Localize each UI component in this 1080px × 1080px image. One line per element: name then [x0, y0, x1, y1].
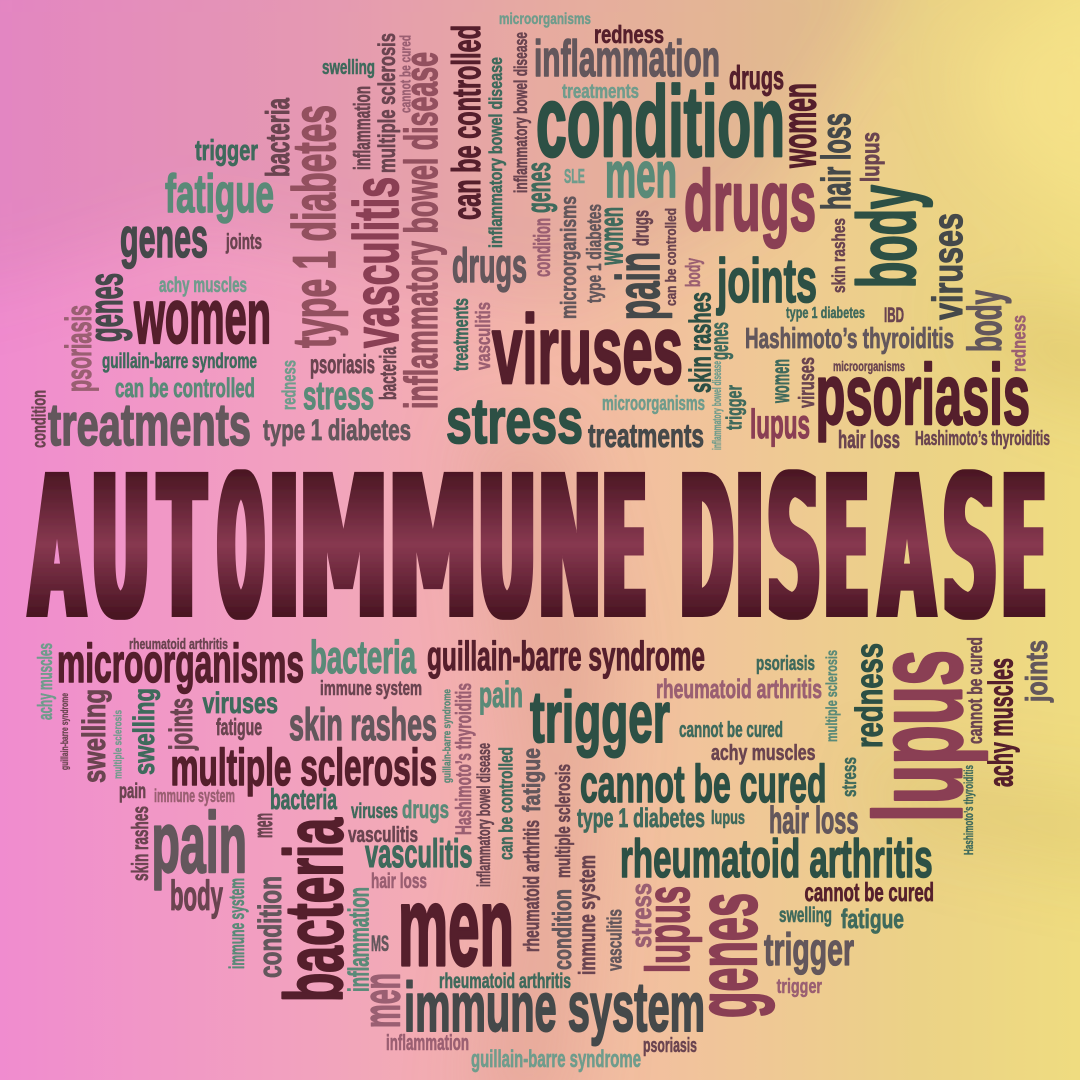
word: psoriasis: psoriasis [58, 305, 99, 392]
word: psoriasis: psoriasis [310, 349, 375, 379]
word: microorganisms: microorganisms [57, 632, 304, 694]
word: drugs: drugs [628, 210, 654, 246]
word: fatigue: fatigue [518, 748, 546, 812]
word: viruses: viruses [492, 295, 683, 404]
word: viruses: viruses [794, 357, 819, 408]
word: viruses: viruses [202, 687, 278, 720]
word: inflammation: inflammation [534, 30, 720, 87]
word: condition: condition [547, 889, 577, 970]
title: S [767, 432, 821, 664]
word: joints: joints [1019, 640, 1054, 703]
word: lupus: lupus [750, 401, 810, 447]
word: guillain-barre syndrome: guillain-barre syndrome [102, 350, 257, 373]
word: achy muscles: achy muscles [711, 740, 816, 765]
word: body: body [842, 185, 933, 288]
word: guillain-barre syndrome: guillain-barre syndrome [427, 633, 705, 679]
word: bacteria: bacteria [375, 347, 401, 400]
word: type 1 diabetes: type 1 diabetes [786, 305, 865, 322]
word: trigger: trigger [195, 135, 258, 167]
word: cannot be cured: cannot be cured [580, 755, 826, 814]
panel: upper word cloud [30, 11, 1050, 458]
word: treatments: treatments [588, 417, 704, 454]
panel: upper word cloud: genes [80, 273, 133, 342]
word: trigger: trigger [722, 385, 746, 430]
word: men: men [605, 138, 677, 211]
title: T [159, 432, 205, 664]
word: achy muscles: achy muscles [982, 658, 1020, 787]
word: stress: stress [303, 374, 374, 418]
word: swelling: swelling [322, 57, 375, 79]
word: women: women [133, 274, 271, 360]
word: genes: genes [520, 162, 558, 213]
word: Hashimoto’s thyroiditis: Hashimoto’s thyroiditis [745, 323, 954, 355]
word: can be controlled: can be controlled [496, 747, 518, 860]
title: N [538, 432, 601, 664]
word: vasculitis: vasculitis [473, 302, 495, 370]
word: multiple sclerosis: multiple sclerosis [553, 764, 575, 878]
word: inflammatory bowel disease: inflammatory bowel disease [486, 57, 506, 248]
word: pain: pain [479, 674, 523, 715]
word: IBD: IBD [884, 304, 904, 327]
title: A [880, 432, 934, 664]
word: type 1 diabetes: type 1 diabetes [584, 204, 606, 303]
word: swelling: swelling [779, 904, 832, 927]
word: cannot be cured: cannot be cured [679, 717, 783, 742]
word: bacteria: bacteria [259, 98, 296, 177]
word: genes: genes [120, 206, 208, 269]
word: inflammation: inflammation [386, 1030, 469, 1055]
word: inflammatory bowel disease: inflammatory bowel disease [474, 743, 494, 887]
word: vasculitis: vasculitis [342, 177, 412, 348]
word: cannot be cured: cannot be cured [965, 637, 987, 744]
word: multiple sclerosis: multiple sclerosis [170, 739, 437, 797]
word: lupus: lupus [855, 132, 885, 182]
title: I [735, 432, 764, 664]
word: immune system: immune system [320, 678, 422, 700]
title: E [824, 432, 868, 664]
word: redness: redness [594, 21, 664, 49]
word: body: body [683, 257, 705, 287]
word: rheumatoid arthritis: rheumatoid arthritis [656, 674, 822, 704]
word: drugs: drugs [452, 240, 527, 293]
word: MS: MS [371, 931, 389, 956]
panel: lower word cloud: men [248, 813, 278, 838]
word: multiple sclerosis: multiple sclerosis [824, 650, 841, 742]
word: Hashimoto’s thyroiditis: Hashimoto’s thyroiditis [451, 683, 476, 835]
word: lupus: lupus [634, 886, 702, 973]
word: condition: condition [252, 876, 288, 978]
word: can be controlled: can be controlled [115, 373, 255, 403]
word: trigger: trigger [764, 924, 854, 975]
word: microorganisms: microorganisms [602, 393, 705, 415]
word: SLE: SLE [564, 166, 585, 188]
word: treatments: treatments [48, 392, 251, 458]
word: genes: genes [706, 322, 734, 360]
word: vasculitis: vasculitis [365, 832, 472, 876]
word: pain: pain [605, 252, 672, 320]
word: swelling: swelling [76, 689, 112, 783]
title: U [478, 432, 536, 664]
word: immune system: immune system [574, 855, 600, 975]
word: body: body [170, 872, 223, 919]
word: women: women [767, 359, 795, 404]
word: women: women [593, 207, 630, 266]
word: immune system: immune system [226, 878, 249, 969]
word: trigger: trigger [530, 678, 670, 758]
word: stress: stress [839, 757, 861, 797]
word: achy muscles: achy muscles [159, 274, 247, 297]
title: D [680, 432, 733, 664]
word: achy muscles: achy muscles [35, 643, 57, 720]
title: O [218, 432, 264, 664]
word: bacteria: bacteria [310, 631, 416, 683]
word: hair loss: hair loss [838, 426, 900, 454]
word: inflammation: inflammation [349, 86, 375, 170]
word: fatigue: fatigue [165, 164, 274, 224]
word: stress: stress [626, 883, 658, 948]
word: microorganisms: microorganisms [833, 358, 905, 374]
word: genes: genes [680, 893, 775, 1018]
word: cannot be cured: cannot be cured [398, 35, 414, 113]
word: men: men [352, 973, 412, 1028]
word: trigger: trigger [777, 976, 822, 998]
word: joints: joints [225, 229, 262, 254]
word: joints: joints [163, 698, 199, 751]
word: treatments: treatments [562, 81, 639, 103]
word: condition: condition [529, 218, 555, 277]
word: men: men [398, 864, 514, 989]
word: immune system: immune system [154, 786, 235, 806]
word: pain: pain [152, 796, 247, 891]
word: inflammatory bowel disease: inflammatory bowel disease [710, 361, 724, 450]
title: M [388, 432, 478, 664]
word: can be controlled: can be controlled [663, 208, 680, 306]
word: psoriasis: psoriasis [643, 1035, 697, 1057]
word: skin rashes: skin rashes [127, 806, 153, 881]
word: type 1 diabetes: type 1 diabetes [263, 414, 411, 447]
word: inflammation: inflammation [344, 887, 376, 992]
word: microorganisms: microorganisms [556, 196, 581, 319]
word: bacteria: bacteria [270, 784, 338, 816]
word: condition: condition [30, 390, 50, 448]
word: women: women [774, 83, 826, 169]
word: hair loss: hair loss [769, 800, 858, 842]
word: guillain-barre syndrome: guillain-barre syndrome [442, 689, 454, 783]
word: skin rashes: skin rashes [289, 699, 437, 750]
word: redness: redness [849, 643, 891, 748]
word: stress: stress [446, 385, 583, 457]
word: condition: condition [536, 66, 785, 178]
word: immune system: immune system [404, 968, 705, 1046]
panel: lower word cloud [35, 631, 1054, 1073]
word: viruses: viruses [351, 800, 398, 823]
word: bacteria: bacteria [269, 817, 360, 1002]
word: lupus: lupus [711, 808, 745, 829]
word: drugs: drugs [684, 154, 816, 249]
word: multiple sclerosis: multiple sclerosis [113, 710, 125, 779]
word: hair loss: hair loss [371, 870, 427, 893]
word: redness: redness [280, 360, 300, 410]
word: hair loss: hair loss [813, 113, 859, 210]
title: M [299, 432, 388, 664]
word: psoriasis: psoriasis [756, 653, 815, 675]
word: joints: joints [716, 247, 817, 316]
title: E [602, 432, 646, 664]
word: body: body [958, 290, 1011, 352]
word: vasculitis: vasculitis [348, 822, 418, 847]
word: Hashimoto’s thyroiditis: Hashimoto’s thyroiditis [961, 765, 976, 855]
word: guillain-barre syndrome: guillain-barre syndrome [60, 693, 71, 770]
word: vasculitis: vasculitis [605, 909, 627, 971]
title: A [30, 432, 84, 664]
word: redness: redness [1010, 315, 1031, 372]
word: skin rashes: skin rashes [829, 218, 849, 293]
word: rheumatoid arthritis: rheumatoid arthritis [439, 970, 571, 993]
word: drugs: drugs [729, 59, 784, 96]
word: swelling: swelling [128, 688, 161, 775]
word: guillain-barre syndrome: guillain-barre syndrome [471, 1046, 641, 1073]
word: pain: pain [119, 780, 146, 803]
title: U [91, 432, 150, 664]
word: skin rashes: skin rashes [682, 292, 718, 393]
word: fatigue: fatigue [841, 904, 904, 934]
word: viruses: viruses [924, 213, 971, 320]
word: cannot be cured: cannot be cured [804, 877, 934, 907]
word: treatments: treatments [450, 298, 473, 371]
word: fatigue: fatigue [216, 714, 262, 740]
word: lupus: lupus [851, 650, 988, 822]
title: I [268, 432, 300, 664]
word: type 1 diabetes: type 1 diabetes [577, 803, 705, 833]
word: rheumatoid arthritis: rheumatoid arthritis [519, 820, 544, 952]
word: drugs: drugs [402, 796, 449, 824]
word: rheumatoid arthritis: rheumatoid arthritis [129, 636, 228, 653]
word: microorganisms: microorganisms [499, 11, 591, 28]
